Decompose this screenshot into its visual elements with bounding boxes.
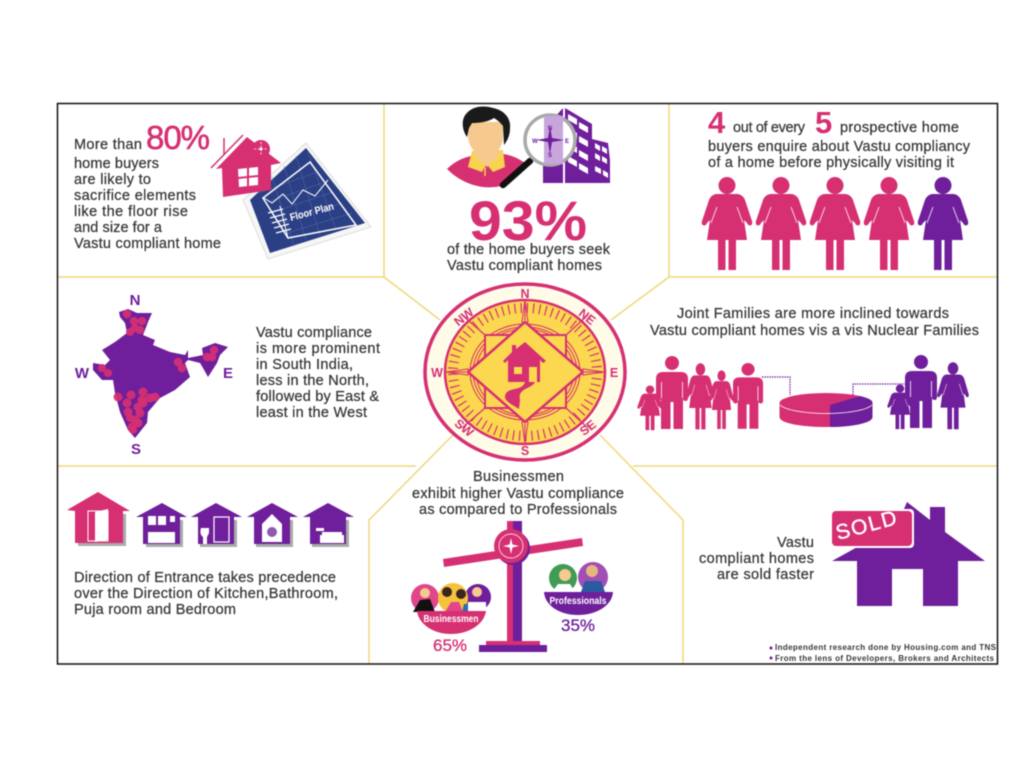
compass labels: SW bbox=[452, 416, 476, 440]
text: direction of entrance bbox=[74, 570, 338, 618]
text: more than 80% bbox=[74, 119, 221, 252]
map compass labels: W bbox=[75, 365, 90, 382]
text: 4 out of every 5: out of every bbox=[733, 120, 806, 136]
icon: buyer bbox=[447, 106, 525, 187]
text: businessmen heading: Businessmen bbox=[473, 469, 564, 485]
text: more than 80%: More than bbox=[74, 137, 142, 153]
text: regional compliance: in South India, bbox=[256, 357, 353, 373]
icon: magnifier: W bbox=[532, 139, 538, 145]
icon: professionals pan bbox=[544, 562, 613, 615]
map compass labels bbox=[75, 292, 233, 458]
panel: 4 out of 5 bbox=[702, 105, 971, 270]
text: more than 80%: are likely to bbox=[74, 172, 151, 188]
pie chart bbox=[780, 393, 872, 427]
compass labels bbox=[431, 287, 618, 458]
icon: bedroom house bbox=[303, 503, 354, 547]
text: buyers seek: Vastu compliant homes bbox=[447, 258, 602, 274]
text: 4 out of every 5: 4 bbox=[708, 105, 726, 140]
icon: building with compass bbox=[543, 108, 610, 183]
frame bbox=[58, 104, 998, 664]
icon: five women bbox=[702, 177, 968, 270]
text: regional compliance: followed by East & bbox=[256, 389, 379, 405]
text: 4 out of every 5: of a home before physically visiting it bbox=[708, 155, 954, 171]
stat: 65%: 65% bbox=[433, 636, 467, 655]
text: more than 80%: Vastu compliant home bbox=[74, 236, 221, 252]
icon: sold house bbox=[830, 502, 985, 606]
compass labels: NE bbox=[576, 306, 598, 328]
panel: sold faster bbox=[699, 502, 997, 663]
text: more than 80%: like the floor rise bbox=[74, 204, 188, 220]
icon: nuclear family bbox=[887, 355, 969, 429]
icon: kitchen house bbox=[136, 503, 187, 547]
compass labels: SE bbox=[577, 417, 599, 439]
panel: direction of entrance bbox=[67, 492, 354, 618]
text: businessmen heading: exhibit higher Vastu compliance bbox=[412, 486, 624, 502]
icon: entrance house bbox=[67, 492, 130, 546]
icon: businessmen pan bbox=[411, 583, 491, 634]
compass labels: W bbox=[431, 366, 443, 380]
footnotes: From the lens of Developers, Brokers and Architects bbox=[775, 654, 995, 663]
compass labels: N bbox=[520, 287, 530, 301]
icon: pink house bbox=[211, 135, 281, 197]
panel: 80 percent of buyers bbox=[74, 119, 371, 259]
icon: professionals pan: Professionals bbox=[550, 596, 607, 607]
text: businessmen heading bbox=[412, 469, 624, 518]
text: regional compliance: less in the North, bbox=[256, 373, 369, 389]
text: buyers seek: of the home buyers seek bbox=[447, 242, 611, 258]
text: joint families: Joint Families are more inclined towards bbox=[677, 306, 949, 322]
icon: floor plan: Floor Plan bbox=[289, 201, 335, 224]
compass labels: E bbox=[610, 366, 618, 380]
panel: India map bbox=[75, 292, 380, 458]
text: direction of entrance: Direction of Entrance takes precedence bbox=[74, 570, 336, 586]
icon: bathroom house bbox=[191, 503, 242, 547]
text: more than 80%: sacrifice elements bbox=[74, 188, 196, 204]
icon: balance scale bbox=[443, 521, 583, 652]
panel: joint vs nuclear families bbox=[637, 306, 979, 430]
text: regional compliance: Vastu compliance bbox=[256, 325, 372, 341]
icon: puja room house bbox=[247, 503, 298, 547]
compass labels: NW bbox=[451, 305, 477, 329]
stat: 35%: 35% bbox=[561, 616, 595, 635]
stat: 93%: 93% bbox=[469, 189, 587, 252]
footnotes: Independent research done by Housing.com and TNS bbox=[775, 643, 997, 652]
icon: floor plan bbox=[243, 143, 371, 259]
text: joint families bbox=[650, 306, 979, 339]
icon: sold house: SOLD bbox=[833, 507, 899, 545]
text: sold faster: are sold faster bbox=[717, 567, 814, 583]
panel: 93 percent bbox=[447, 106, 611, 274]
map compass labels: N bbox=[130, 292, 140, 309]
icon: magnifier: E bbox=[565, 139, 569, 145]
footnotes bbox=[770, 643, 997, 663]
text: joint families: Vastu compliant homes vis a vis Nuclear Families bbox=[650, 323, 979, 339]
icon: businessmen pan: Businessmen bbox=[424, 614, 478, 625]
text: buyers seek bbox=[447, 242, 611, 274]
icon: house with path bbox=[503, 342, 546, 409]
text: more than 80%: and size for a bbox=[74, 220, 163, 236]
map of India bbox=[93, 309, 228, 438]
text: more than 80%: home buyers bbox=[74, 156, 159, 172]
icon: magnifier: N bbox=[548, 126, 552, 132]
connector lines bbox=[762, 377, 905, 395]
panel: businessmen vs professionals bbox=[411, 469, 624, 655]
map compass labels: S bbox=[131, 441, 141, 458]
icon: joint family bbox=[637, 356, 763, 430]
text: 4 out of every 5 bbox=[708, 105, 971, 171]
icon: magnifier bbox=[503, 115, 575, 185]
text: regional compliance: least in the West bbox=[256, 405, 367, 421]
text: sold faster: Vastu bbox=[777, 535, 814, 551]
icon: magnifier: S bbox=[548, 153, 552, 159]
map compass labels: E bbox=[223, 365, 233, 382]
compass labels: S bbox=[521, 444, 529, 458]
text: direction of entrance: over the Direction of Kitchen,Bathroom, bbox=[74, 586, 338, 602]
text: regional compliance: is more prominent bbox=[256, 341, 380, 357]
compass centre bbox=[425, 284, 625, 460]
text: 4 out of every 5: buyers enquire about Vastu compliancy bbox=[708, 139, 971, 155]
text: 4 out of every 5: 5 bbox=[815, 105, 832, 140]
text: 4 out of every 5: prospective home bbox=[840, 120, 959, 136]
text: direction of entrance: Puja room and Bedroom bbox=[74, 602, 236, 618]
text: regional compliance bbox=[256, 325, 380, 421]
text: more than 80%: 80% bbox=[146, 119, 210, 156]
text: businessmen heading: as compared to Professionals bbox=[419, 502, 617, 518]
text: sold faster bbox=[699, 535, 814, 583]
text: sold faster: compliant homes bbox=[699, 551, 814, 567]
